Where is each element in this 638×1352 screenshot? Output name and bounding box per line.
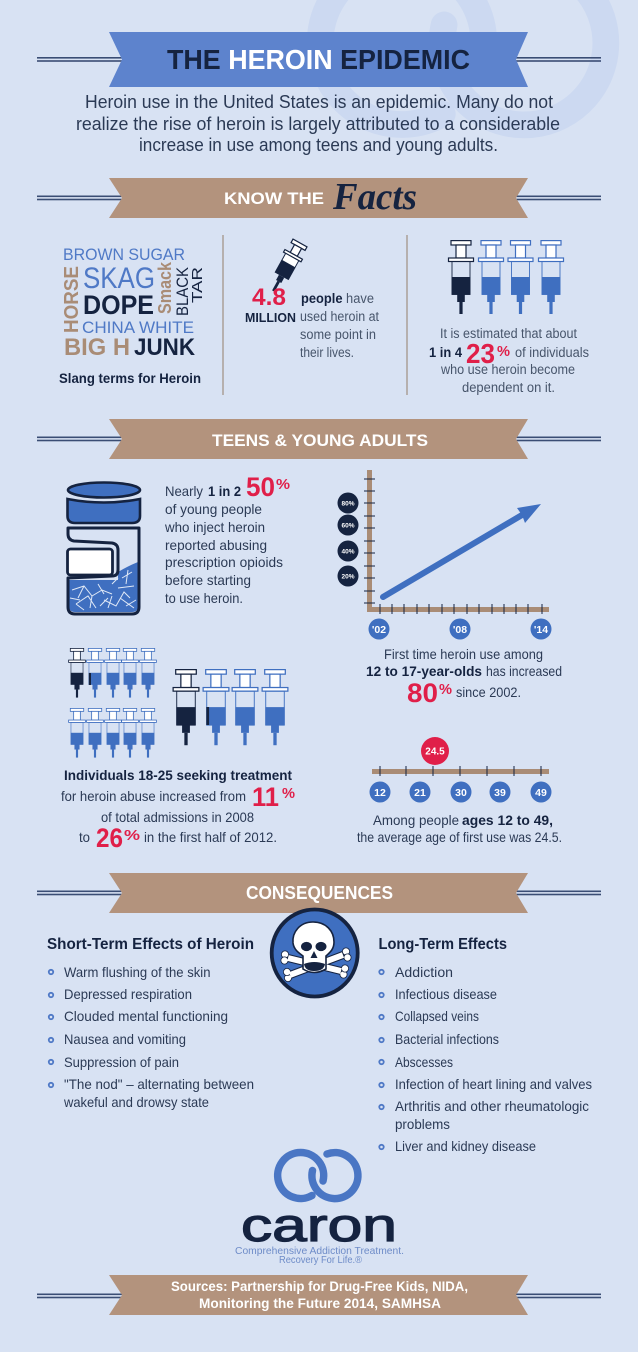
intro text: realize the rise of heroin is largely attributed to a considerable xyxy=(76,114,560,134)
Caron logo xyxy=(235,1152,404,1266)
list: long-term effects: Liver and kidney disease xyxy=(395,1138,536,1154)
stat: treatment admissions xyxy=(61,767,295,853)
stat: 1 in 2: 50 xyxy=(246,472,275,502)
title banner: THE HEROIN EPIDEMIC xyxy=(167,44,470,75)
section banner: consequences xyxy=(37,873,601,913)
age labels: 30 xyxy=(455,787,467,799)
heading: long-term effects: Long-Term Effects xyxy=(378,936,507,953)
stat: 4.8 million: their lives. xyxy=(300,345,354,360)
stat: 1 in 2: reported abusing xyxy=(165,537,267,553)
cap band xyxy=(68,499,140,523)
stat: treatment admissions: of total admissions in 2008 xyxy=(101,809,254,825)
list: long-term effects: Bacterial infections xyxy=(395,1031,499,1047)
icon: 2012 syringes, four xyxy=(173,670,288,745)
icon: skull and crossbones xyxy=(272,910,358,996)
slang word cloud: HORSE xyxy=(61,266,83,333)
stat: 1 in 4: % xyxy=(497,343,510,360)
Caron logo: Recovery For Life.® xyxy=(279,1254,362,1266)
skull xyxy=(293,922,334,972)
stat: treatment admissions: Individuals 18-25 seeking treatment xyxy=(64,767,292,783)
section banner: know the facts: KNOW THE xyxy=(224,189,324,208)
divider xyxy=(406,235,408,395)
crossed bones xyxy=(281,948,351,982)
pills xyxy=(69,562,138,612)
stat: 1 in 2: who inject heroin xyxy=(164,519,265,535)
label xyxy=(68,549,112,575)
stat: 1 in 2: to use heroin. xyxy=(165,590,243,606)
slang word cloud: BIG H xyxy=(64,334,130,361)
slang caption: Slang terms for Heroin xyxy=(59,371,201,386)
stat: 4.8 million: some point in xyxy=(300,327,376,342)
slang word cloud xyxy=(61,245,206,361)
list: short-term effects: wakeful and drowsy state xyxy=(63,1094,209,1110)
slang word cloud: DOPE xyxy=(83,290,154,320)
sources banner xyxy=(37,1275,601,1315)
slang word cloud: JUNK xyxy=(134,334,196,361)
stat: 1 in 4: dependent on it. xyxy=(462,380,555,395)
stat: average age: ages 12 to 49, xyxy=(462,812,553,828)
stat: treatment admissions: to xyxy=(79,829,90,845)
stat: average age xyxy=(357,812,562,845)
list: long-term effects: problems xyxy=(395,1116,450,1132)
stat: 80 percent: % xyxy=(439,681,452,698)
age labels: 39 xyxy=(494,787,506,799)
intro text xyxy=(76,92,560,155)
stat: 1 in 2: 1 in 2 xyxy=(208,483,241,499)
icon: 2008 syringes, ten xyxy=(69,648,156,758)
title banner xyxy=(37,32,601,87)
stat: 80 percent: First time heroin use among xyxy=(384,646,543,662)
section banner: consequences: CONSEQUENCES xyxy=(246,883,393,903)
list: long-term effects: Addiction xyxy=(395,964,453,980)
stat: 1 in 2: of young people xyxy=(165,501,262,517)
list: long-term effects: Infection of heart lining and valves xyxy=(395,1076,592,1092)
stat: 80 percent: since 2002. xyxy=(456,684,521,700)
stat: 1 in 4: It is estimated that about xyxy=(440,326,577,341)
x axis labels: '08 xyxy=(453,624,467,636)
stat: 4.8 million: used heroin at xyxy=(300,309,379,324)
logo rings xyxy=(278,1152,358,1199)
y axis labels: 20% xyxy=(341,574,355,580)
section banner: teens and young adults: TEENS & YOUNG ADULTS xyxy=(212,431,428,450)
stat: average age: Among people xyxy=(373,812,459,828)
stat: 1 in 2 xyxy=(164,472,290,606)
stat: treatment admissions: 11 xyxy=(252,782,279,812)
stat: 1 in 2: before starting xyxy=(165,572,251,588)
slang word cloud: SKAG xyxy=(83,262,155,295)
stat: 4.8 million xyxy=(245,284,379,360)
stat: treatment admissions: % xyxy=(124,827,140,844)
list: long-term effects xyxy=(379,964,592,1154)
sources banner: Monitoring the Future 2014, SAMHSA xyxy=(199,1296,441,1311)
y axis labels: 40% xyxy=(341,548,355,556)
list: short-term effects xyxy=(49,964,254,1110)
section banner: know the facts: Facts xyxy=(332,176,417,218)
age labels: 49 xyxy=(535,787,547,799)
intro text: increase in use among teens and young adults. xyxy=(139,135,498,155)
list: long-term effects: Arthritis and other rheumatologic xyxy=(395,1098,589,1114)
arrow xyxy=(383,504,541,597)
slang word cloud: CHINA WHITE xyxy=(82,318,194,337)
stat: treatment admissions: % xyxy=(282,785,295,802)
list: short-term effects: Depressed respiration xyxy=(64,986,192,1002)
stat: 1 in 4: 1 in 4 xyxy=(429,345,462,360)
stat: 1 in 4: of individuals xyxy=(515,345,589,360)
stat: 4.8 million: 4.8 xyxy=(252,284,286,311)
list: short-term effects: "The nod" – alternating between xyxy=(64,1076,254,1092)
axes xyxy=(370,470,549,610)
section banner: teens and young adults xyxy=(37,419,601,459)
sources banner: Sources: Partnership for Drug-Free Kids, NIDA, xyxy=(171,1279,468,1294)
age timeline xyxy=(370,737,552,802)
list: short-term effects: Suppression of pain xyxy=(64,1054,179,1070)
stat: 1 in 4: 23 xyxy=(466,338,495,369)
stat: 4.8 million: people have xyxy=(301,291,374,306)
cap top xyxy=(68,482,140,498)
age labels: 21 xyxy=(414,787,426,799)
stat: 80 percent: has increased xyxy=(486,663,562,679)
stat: 1 in 4 xyxy=(429,326,589,395)
age timeline: 24.5 xyxy=(425,746,445,758)
y axis labels: 80% xyxy=(341,500,355,508)
divider xyxy=(222,235,224,395)
x axis labels: '14 xyxy=(534,624,548,636)
list: short-term effects: Clouded mental functioning xyxy=(64,1008,228,1024)
stat: treatment admissions: in the first half of 2012. xyxy=(144,829,277,845)
marker: average age xyxy=(421,737,449,765)
bottle outline xyxy=(68,528,139,614)
icon: pill bottle xyxy=(68,482,140,614)
slang word cloud: Smack xyxy=(155,261,175,314)
stat: 1 in 4: who use heroin become xyxy=(440,362,575,377)
list: short-term effects: Nausea and vomiting xyxy=(64,1031,186,1047)
list: long-term effects: Infectious disease xyxy=(395,986,497,1002)
stat: 80 percent: 12 to 17-year-olds xyxy=(366,663,482,679)
stat: 4.8 million: MILLION xyxy=(245,311,296,325)
icon: four syringes, one in four dark xyxy=(448,241,564,314)
stat: treatment admissions: 26 xyxy=(96,823,123,853)
stat: 1 in 2: Nearly xyxy=(165,483,203,499)
y axis labels: 60% xyxy=(341,522,355,530)
x axis labels xyxy=(368,618,552,640)
line chart: first time use xyxy=(338,470,552,640)
intro text: Heroin use in the United States is an epidemic. Many do not xyxy=(85,92,553,112)
age labels xyxy=(370,782,552,802)
age labels: 12 xyxy=(374,787,386,799)
slang word cloud: TAR xyxy=(189,267,206,303)
slang word cloud: BLACK xyxy=(174,267,192,316)
tagline: Comprehensive Addiction Treatment. xyxy=(235,1245,404,1257)
stat: 1 in 2: prescription opioids xyxy=(165,554,283,570)
stat: 1 in 2: % xyxy=(276,476,290,493)
list: long-term effects: Collapsed veins xyxy=(395,1008,479,1024)
stat: 80 percent: 80 xyxy=(407,678,438,708)
x axis labels: '02 xyxy=(372,624,386,636)
watermark logo rings xyxy=(320,0,606,125)
stat: average age: the average age of first use was 24.5. xyxy=(357,829,562,845)
y axis labels xyxy=(338,492,358,586)
list: short-term effects: Warm flushing of the skin xyxy=(64,964,210,980)
list: long-term effects: Abscesses xyxy=(395,1054,453,1070)
stat: treatment admissions: for heroin abuse increased from xyxy=(61,788,246,804)
slang word cloud: BROWN SUGAR xyxy=(63,245,185,264)
stat: 80 percent xyxy=(366,646,562,708)
wordmark: caron xyxy=(241,1199,397,1251)
section banner: know the facts xyxy=(37,176,601,218)
icon: tilted syringe xyxy=(265,238,309,296)
heading: short-term effects: Short-Term Effects of Heroin xyxy=(47,936,254,953)
